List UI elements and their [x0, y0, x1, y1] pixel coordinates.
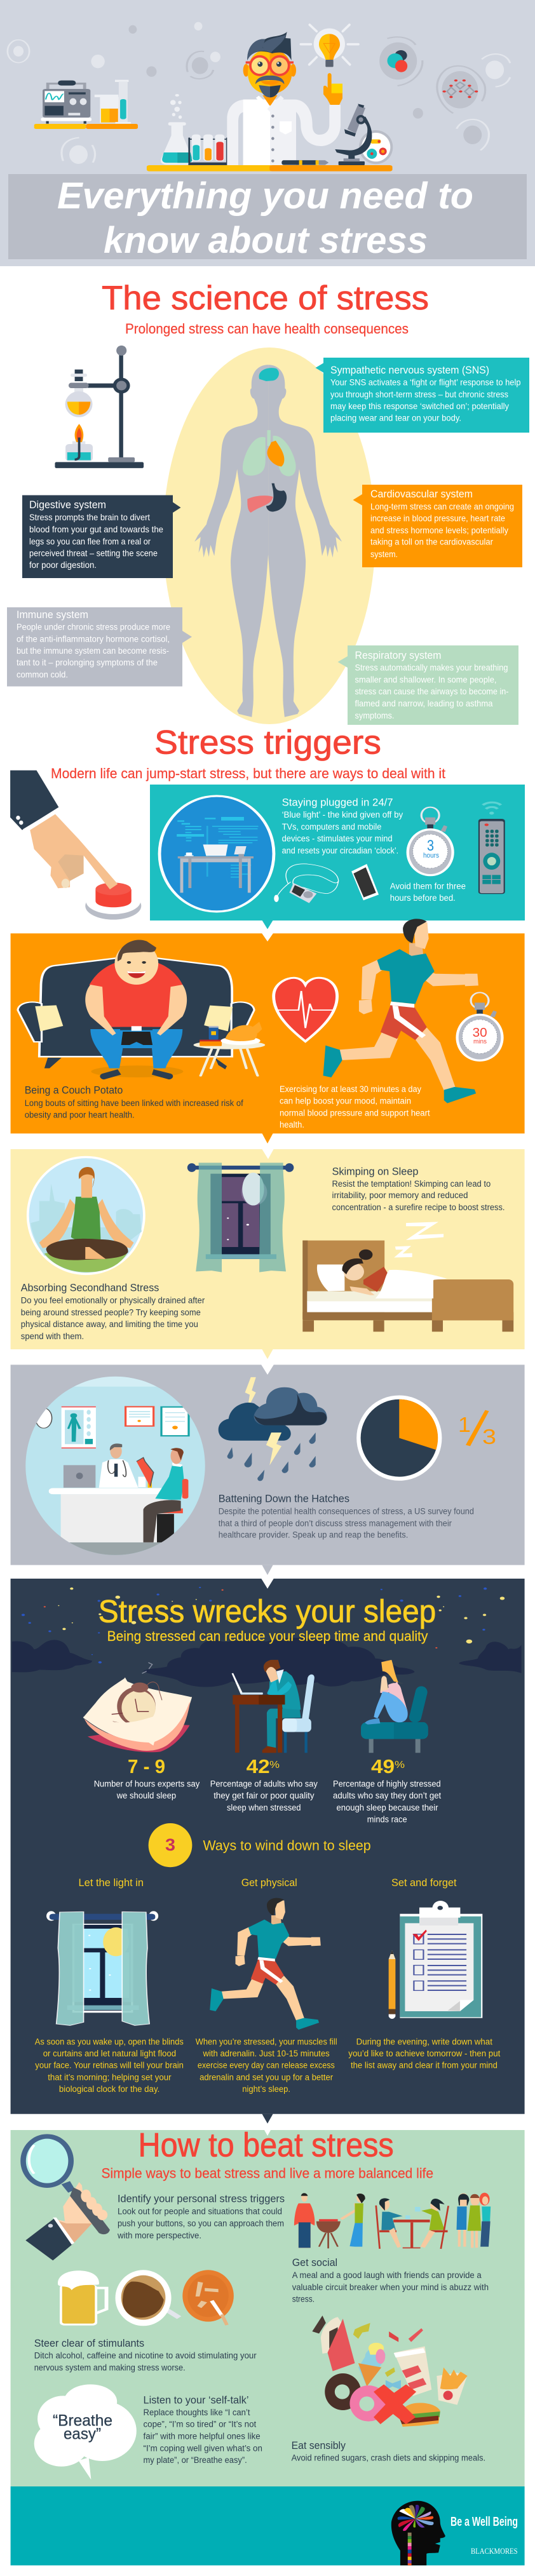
stat: 7 - 9 hours: Number of hours experts say: [94, 1779, 200, 1789]
callout: immune system: but the immune system can become resis-: [17, 645, 169, 656]
text: blackmores: BLACKMORES: [471, 2546, 518, 2556]
pointer notch: [262, 933, 273, 941]
illustration: junk food crossed out: [312, 2316, 468, 2427]
text: eat sensibly: Eat sensibly: [292, 2439, 346, 2451]
stat: 42 percent: [210, 1755, 318, 1812]
icon: devices: [274, 864, 379, 903]
callout: cardiovascular system: taking a toll on the cardiovascular: [370, 537, 493, 547]
text: staying plugged in: Staying plugged in 24/7: [282, 796, 393, 808]
heading: the science of stress: The science of stress: [102, 280, 429, 317]
text: absorbing secondhand stress: Absorbing Secondhand Stress: [21, 1282, 159, 1294]
stat: 7 - 9 hours: we should sleep: [116, 1791, 176, 1800]
text: steer clear of stimulants: nervous system and making stress worse.: [34, 2363, 186, 2372]
callout: digestive system: [22, 496, 180, 578]
stat: 42 percent: sleep when stressed: [227, 1803, 301, 1812]
illustration: day window: [46, 1911, 158, 2025]
stat: 49 percent: [333, 1755, 441, 1824]
text: absorbing secondhand stress: physical distance away, and limiting the time you: [21, 1319, 198, 1329]
column: let the light in: As soon as you wake up, open the blinds: [35, 2037, 184, 2046]
panel: secondhand stress and skimping on sleep: [11, 1149, 525, 1359]
text: skimping on sleep: [332, 1165, 505, 1212]
callout: respiratory system: symptoms.: [355, 710, 394, 720]
column: set and forget: Set and forget: [391, 1877, 457, 1889]
text: battening down the hatches: Battening Down the Hatches: [219, 1493, 349, 1505]
callout: sympathetic nervous system: placing wear and tear on your body.: [330, 413, 461, 423]
panel: how to beat stress: [11, 2126, 525, 2486]
callout: digestive system: for poor digestion.: [29, 560, 97, 570]
illustration: side table with food: [193, 1022, 265, 1076]
text: listen to your self-talk: cope”, “I’m so tired” or “It’s not: [144, 2420, 256, 2429]
text: being a couch potato: Being a Couch Potato: [25, 1084, 123, 1096]
chart: one third pie: 1: [458, 1413, 471, 1436]
callout: immune system: Immune system: [17, 609, 88, 621]
callout: breathe easy speech cloud: “Breathe: [53, 2411, 112, 2429]
illustration: alarm clock on pillow: [83, 1662, 192, 1752]
icon: heart with ecg line: [274, 978, 337, 1041]
text: absorbing secondhand stress: being around stressed people? Try keeping some: [21, 1307, 201, 1317]
column: get physical: Get physical: [241, 1877, 297, 1889]
callout: digestive system: perceived threat – setting the scene: [29, 548, 158, 558]
illustration: friends socialising: [294, 2193, 491, 2249]
illustration: body silhouette with organs: [194, 365, 342, 717]
panel: staying plugged in: [150, 785, 525, 929]
stat: 7 - 9 hours: 7 - 9: [128, 1755, 165, 1777]
column: let the light in: biological clock for the day.: [59, 2084, 159, 2094]
stat: 42 percent: 42: [247, 1755, 270, 1777]
illustration: scientist: [227, 25, 393, 165]
text: exercising: can help boost your mood, maintain: [280, 1096, 411, 1106]
pointer notch: [261, 1579, 274, 1589]
text: steer clear of stimulants: [34, 2337, 257, 2372]
chart: one third pie: [356, 1395, 496, 1481]
icon: hand with magnifying glass: [20, 2134, 110, 2260]
text: eat sensibly: Avoid refined sugars, crash diets and skipping meals.: [292, 2453, 485, 2463]
chart: one third pie: 3: [482, 1425, 496, 1448]
illustration: blue desk circle: [158, 795, 275, 929]
text: get social: stress.: [292, 2294, 315, 2303]
stat: 49 percent: adults who say they don’t get: [333, 1791, 441, 1800]
text: steer clear of stimulants: Ditch alcohol, caffeine and nicotine to avoid stimulating your: [34, 2351, 257, 2361]
callout: cardiovascular system: system.: [370, 549, 398, 559]
illustration: clipboard and pencil: [389, 1901, 482, 2019]
stat: 49 percent: minds race: [367, 1814, 407, 1824]
icon: lab burner and flask on stand: [55, 346, 144, 468]
logo: head with colour fan: [391, 2501, 445, 2565]
text: staying plugged in: and resets your circadian ‘clock’.: [282, 846, 398, 855]
text: exercising: normal blood pressure and support heart: [280, 1108, 430, 1117]
text: battening down the hatches: healthcare provider. Speak up and reap the benefits.: [219, 1530, 408, 1540]
pointer notch: [261, 1365, 274, 1375]
text: skimping on sleep: Skimping on Sleep: [332, 1165, 418, 1177]
text: staying plugged in: TVs, computers and mobile: [282, 822, 381, 832]
panel: couch potato and exercise: [11, 919, 525, 1143]
pointer down: [262, 1133, 273, 1143]
illustration: night window with curtains: [187, 1163, 294, 1272]
heading: how to beat stress: How to beat stress: [139, 2126, 394, 2164]
column: get physical: [196, 1877, 337, 2094]
panel: stress wrecks your sleep: [11, 1579, 525, 2124]
text: listen to your self-talk: “I’m coping well given what’s on: [144, 2443, 262, 2453]
text: staying plugged in: ‘Blue light’ - the kind given off by: [282, 810, 403, 819]
text: identify stress triggers: Identify your personal stress triggers: [118, 2193, 285, 2205]
callout: immune system: People under chronic stress produce more: [17, 621, 170, 631]
pointer down: [262, 1565, 273, 1575]
icon: stopwatch 30 mins: [456, 992, 504, 1062]
callout: immune system: [7, 607, 192, 686]
stat: 49 percent: enough sleep because their: [337, 1803, 438, 1812]
icon: stopwatch 3 hours: 3: [427, 837, 434, 854]
callout: sympathetic nervous system: Your SNS activates a ‘fight or flight’ response to help: [330, 377, 521, 388]
text: eat sensibly: [292, 2439, 485, 2463]
text: listen to your self-talk: Replace thoughts like “I can’t: [144, 2408, 250, 2417]
callout: sympathetic nervous system: may keep this response ‘switched on’; potentially: [330, 401, 509, 411]
header panel: [0, 0, 535, 266]
stat: 42 percent: they get fair or poor quality: [213, 1791, 315, 1800]
subheading: being stressed: Being stressed can reduce your sleep time and quality: [107, 1628, 428, 1644]
callout: respiratory system: stress can cause the airways to become in-: [355, 686, 509, 696]
callout: digestive system: legs so you can flee from a real or: [29, 536, 151, 546]
text: being a couch potato: Long bouts of sitting have been linked with increased risk of: [25, 1098, 243, 1108]
heading: stress wrecks your sleep: Stress wrecks your sleep: [98, 1594, 436, 1629]
badge: 3 ways to wind down: 3: [165, 1835, 175, 1854]
callout: sympathetic nervous system: you through short-term stress – but chronic stress: [330, 389, 508, 399]
text: listen to your self-talk: fair” with more helpful ones like: [144, 2431, 261, 2441]
illustration: doctor's office circle: [24, 1376, 208, 1558]
callout: breathe easy speech cloud: [34, 2384, 137, 2479]
text: listen to your self-talk: [144, 2394, 262, 2465]
text: identify stress triggers: Look out for people and situations that could: [118, 2207, 282, 2216]
stat: 7 - 9 hours: [94, 1755, 200, 1800]
text: exercising: health.: [280, 1120, 304, 1130]
desk: [147, 165, 393, 172]
text: avoid them: hours before bed.: [390, 893, 456, 903]
icon: remote control: [478, 802, 505, 894]
footer panel: [11, 2486, 525, 2565]
text: staying plugged in: [282, 796, 403, 855]
callout: sympathetic nervous system: [315, 358, 529, 433]
text: get social: valuable circuit breaker when your mind is abuzz with: [292, 2283, 489, 2292]
text: battening down the hatches: that a third of people don’t discuss stress management with their: [219, 1518, 452, 1528]
text: being a couch potato: [25, 1084, 243, 1120]
pointer notch: [264, 2130, 271, 2136]
icon: pointing hand: [323, 73, 342, 105]
column: set and forget: you’d like to achieve tomorrow - then put: [348, 2049, 501, 2058]
title band: [8, 174, 527, 261]
yellow body oval: [163, 347, 376, 724]
section: stress triggers heading: [51, 724, 445, 781]
icon: light bulb: [301, 25, 358, 67]
column: let the light in: [35, 1877, 184, 2094]
title band: Everything you need to: [57, 175, 473, 217]
text: staying plugged in: devices - stimulates your mind: [282, 834, 393, 844]
callout: digestive system: Stress prompts the brain to divert: [29, 512, 150, 522]
callout: cardiovascular system: Cardiovascular system: [370, 488, 473, 500]
subheading: modern life: Modern life can jump-start stress, but there are ways to deal with it: [51, 765, 445, 781]
column: let the light in: that it’s morning; helping set your: [48, 2072, 172, 2082]
column: get physical: When you’re stressed, your muscles fill: [196, 2037, 337, 2046]
icon: lab machine and beakers: [34, 80, 138, 129]
text: absorbing secondhand stress: spend with them.: [21, 1332, 84, 1341]
icon: fountain pen: [281, 160, 328, 165]
icon: stopwatch 30 mins: mins: [473, 1038, 487, 1046]
text: skimping on sleep: Resist the temptation! Skimping can lead to: [332, 1179, 491, 1189]
column: set and forget: During the evening, write down what: [356, 2037, 492, 2046]
callout: respiratory system: Stress automatically makes your breathing: [355, 663, 508, 673]
text: steer clear of stimulants: Steer clear of stimulants: [34, 2337, 144, 2349]
text: get social: Get social: [292, 2256, 337, 2269]
text: battening down the hatches: Despite the potential health consequences of stress, a US survey found: [219, 1507, 474, 1516]
stat: 49 percent: %: [395, 1760, 405, 1770]
callout: immune system: tant to it – prolonging symptoms of the: [17, 657, 158, 668]
stat: 49 percent: Percentage of highly stressed: [333, 1779, 441, 1789]
text: skimping on sleep: concentration - a surefire recipe to boost stress.: [332, 1203, 505, 1212]
column: set and forget: [348, 1877, 501, 2070]
icon: stopwatch 30 mins: 30: [473, 1026, 487, 1040]
pointer notch: [262, 1149, 274, 1159]
text: get social: A meal and a good laugh with friends can provide a: [292, 2270, 482, 2280]
title band: know about stress: [104, 220, 428, 261]
badge: 3 ways to wind down: [149, 1823, 371, 1867]
badge: 3 ways to wind down: Ways to wind down to sleep: [203, 1837, 371, 1853]
stat: 42 percent: %: [269, 1760, 280, 1770]
text: identify stress triggers: with more perspective.: [117, 2230, 201, 2240]
subheading: prolonged stress: Prolonged stress can have health consequences: [125, 321, 409, 337]
stat: 49 percent: 49: [371, 1755, 395, 1777]
icon: beer, coffee, ashtray: [58, 2270, 234, 2326]
text: listen to your self-talk: Listen to your ‘self-talk’: [144, 2394, 249, 2406]
callout: immune system: of the anti-inflammatory hormone cortisol,: [17, 633, 170, 644]
text: being a couch potato: obesity and poor heart health.: [25, 1110, 135, 1120]
text: skimping on sleep: irritability, poor memory and reduced: [332, 1190, 468, 1200]
illustration: runner: [210, 1898, 321, 2030]
pointer down: [262, 1349, 273, 1359]
illustration: man on couch: [18, 940, 254, 1079]
callout: digestive system: blood from your gut and towards the: [29, 524, 163, 534]
callout: breathe easy speech cloud: easy”: [64, 2425, 101, 2443]
column: get physical: night’s sleep.: [242, 2084, 290, 2094]
callout: respiratory system: [338, 645, 518, 725]
callout: immune system: common cold.: [17, 670, 68, 680]
text: battening down the hatches: [219, 1493, 474, 1540]
icon: molecules: [387, 50, 478, 98]
column: get physical: adrenalin and set you up for a better: [200, 2072, 334, 2082]
callout: respiratory system: Respiratory system: [355, 649, 441, 661]
panel: battening down the hatches: [11, 1365, 525, 1575]
icon: flask and test tubes: [161, 94, 231, 165]
icon: stopwatch 3 hours: [407, 807, 454, 876]
text: absorbing secondhand stress: Do you feel emotionally or physically drained after: [21, 1296, 205, 1305]
text: exercising: [280, 1084, 430, 1130]
illustration: woman on bench: [361, 1660, 428, 1753]
column: let the light in: your face. Your retinas will tell your brain: [35, 2061, 184, 2070]
text: identify stress triggers: [117, 2193, 285, 2240]
illustration: yoga woman: [27, 1156, 146, 1275]
icon: hand pressing red button: [10, 771, 141, 920]
text: listen to your self-talk: my plate”, or “Breathe easy”.: [144, 2455, 247, 2465]
illustration: runner: [323, 919, 478, 1103]
column: let the light in: or curtains and let natural light flood: [43, 2049, 176, 2058]
text: absorbing secondhand stress: [21, 1282, 205, 1341]
illustration: woman sleeping in bed: [302, 1222, 513, 1332]
text: avoid them: [390, 882, 466, 903]
callout: digestive system: Digestive system: [29, 499, 106, 511]
text: avoid them: Avoid them for three: [390, 882, 466, 891]
callout: respiratory system: flamed and narrow, leading to asthma: [355, 698, 493, 708]
text: identify stress triggers: push your buttons, so you can approach them: [118, 2219, 284, 2229]
icon: storm cloud: [219, 1377, 327, 1481]
illustration: man at desk: [232, 1660, 315, 1753]
column: let the light in: Let the light in: [79, 1877, 144, 1889]
subheading: simple ways: Simple ways to beat stress and live a more balanced life: [102, 2165, 433, 2181]
callout: cardiovascular system: [353, 485, 522, 567]
stars and night clouds: [12, 1587, 522, 1687]
stat: 42 percent: Percentage of adults who say: [210, 1779, 318, 1789]
callout: sympathetic nervous system: Sympathetic nervous system (SNS): [330, 364, 489, 376]
column: get physical: exercise every day can release excess: [198, 2061, 335, 2070]
callout: cardiovascular system: and stress hormone levels; potentially: [370, 525, 508, 535]
heading: stress triggers: Stress triggers: [154, 724, 381, 762]
section: the science of stress: [7, 280, 529, 725]
column: set and forget: the list away and clear it from your mind: [351, 2061, 498, 2070]
icon: microscope: [335, 104, 372, 165]
callout: cardiovascular system: Long-term stress can create an ongoing: [370, 501, 514, 511]
background bubbles: [8, 22, 510, 164]
callout: respiratory system: smaller and shallower. In some people,: [355, 675, 497, 685]
icon: stopwatch 3 hours: hours: [423, 852, 439, 860]
column: get physical: with adrenalin. Just 10-15 minutes: [203, 2049, 330, 2058]
text: get social: [292, 2256, 489, 2303]
pointer down: [262, 2114, 273, 2124]
text: exercising: Exercising for at least 30 minutes a day: [280, 1084, 421, 1094]
callout: cardiovascular system: increase in blood pressure, heart rate: [370, 513, 505, 523]
